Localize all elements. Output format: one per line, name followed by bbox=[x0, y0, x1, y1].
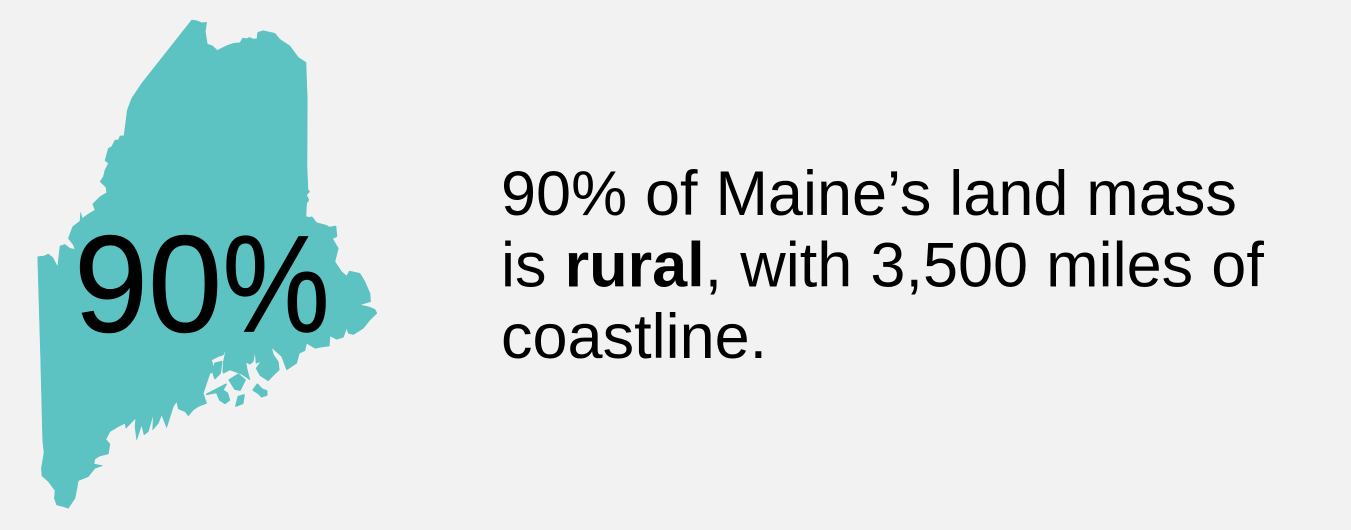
text block: description: is rural, with 3,500 miles of bbox=[501, 230, 1264, 300]
big statistic: 90% bbox=[74, 206, 330, 361]
text block: description: coastline. bbox=[501, 302, 767, 372]
icon: map of Maine bbox=[38, 20, 377, 508]
text block: description: 90% of Maine’s land mass bbox=[501, 159, 1237, 229]
big statistic: 90%: % bbox=[222, 208, 330, 361]
big statistic: 90%: 90 bbox=[74, 206, 222, 361]
text block: description bbox=[501, 159, 1264, 372]
